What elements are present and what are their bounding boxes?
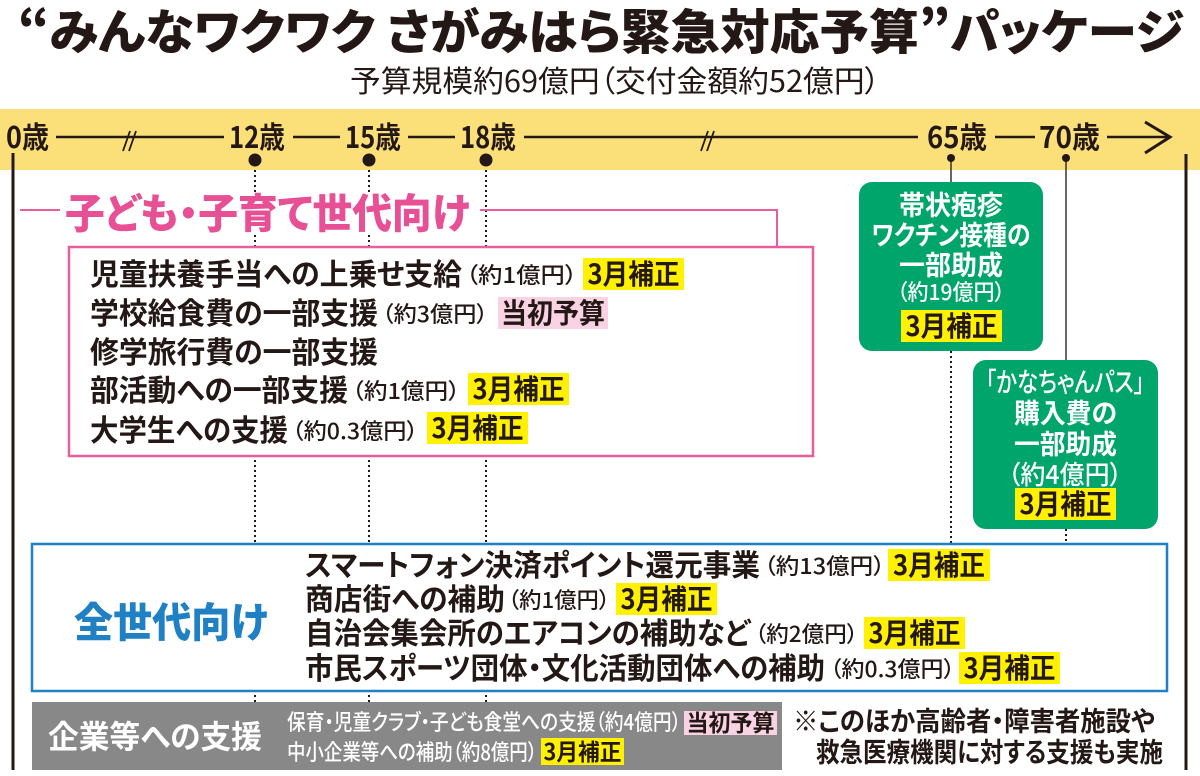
row: 3月補正	[432, 407, 524, 447]
row: （約0.3億円）	[292, 414, 418, 446]
row: 中小企業等への補助（約8億円）	[287, 735, 537, 767]
row: 3月補正	[620, 578, 712, 618]
row: （約2億円）	[755, 617, 858, 649]
row: （約3億円）	[382, 297, 488, 329]
row: スマートフォン決済ポイント還元事業	[305, 541, 760, 585]
age labels: 12歳	[229, 113, 285, 157]
row: 3月補正	[544, 733, 622, 767]
age timeline band	[0, 109, 1200, 170]
age labels	[6, 113, 1100, 157]
age labels: 18歳	[460, 113, 516, 157]
row: （約1億円）	[508, 583, 610, 615]
row: 大学生への支援	[90, 406, 288, 450]
row: 当初予算	[501, 292, 605, 332]
row: 保育・児童クラブ・子ども食堂への支援（約4億円）	[287, 705, 681, 737]
row: 3月補正	[472, 368, 564, 408]
panel: shingles vaccine: ワクチン接種の	[872, 214, 1030, 253]
row: 3月補正	[893, 544, 985, 584]
panel: Kanachan pass: 一部助成	[1014, 423, 1117, 462]
row: 3月補正	[964, 647, 1056, 687]
row: 当初予算	[686, 704, 774, 738]
row: 自治会集会所のエアコンの補助など	[305, 609, 752, 653]
row: （約0.3億円）	[830, 652, 955, 684]
panel: Kanachan pass: （約4億円）	[1008, 455, 1122, 492]
row: 3月補正	[868, 612, 960, 652]
subtitle: 予算規模約69億円（交付金額約52億円）	[350, 57, 880, 101]
age labels: 65歳	[927, 113, 987, 157]
row: 修学旅行費の一部支援	[90, 328, 378, 372]
heading: all generations: 全世代向け	[74, 589, 268, 649]
age labels: 0歳	[6, 113, 49, 157]
axis line with arrow	[56, 122, 1170, 153]
age guide lines and dots	[13, 153, 1186, 770]
panel: shingles vaccine: 一部助成	[899, 244, 1003, 283]
row	[90, 366, 569, 410]
panel: shingles vaccine: 帯状疱疹	[899, 184, 1003, 223]
age labels: 70歳	[1039, 113, 1100, 157]
row	[305, 541, 990, 585]
row: 3月補正	[588, 253, 680, 293]
heading: children: 子ども・子育て世代向け	[65, 180, 470, 240]
row	[90, 250, 684, 294]
panel: shingles vaccine: （約19億円）	[897, 275, 1005, 307]
panel: Kanachan pass: 3月補正	[1020, 483, 1112, 523]
row: 市民スポーツ団体・文化活動団体への補助	[305, 644, 825, 688]
panel: Kanachan pass: 購入費の	[1014, 392, 1117, 431]
row: 商店街への補助	[305, 575, 505, 619]
panel: shingles vaccine: 3月補正	[906, 305, 998, 345]
row	[90, 406, 528, 450]
row: （約1億円）	[466, 258, 577, 290]
row	[90, 289, 608, 333]
row: （約13億円）	[764, 549, 885, 581]
panel: business support	[32, 702, 782, 770]
panel: Kanachan pass	[973, 360, 1158, 529]
row	[305, 575, 717, 619]
age labels: 15歳	[345, 113, 401, 157]
panel: shingles vaccine	[859, 182, 1043, 351]
row: 児童扶養手当への上乗せ支給	[90, 250, 462, 294]
row: 部活動への一部支援	[90, 366, 348, 410]
note	[793, 700, 1163, 770]
panel: Kanachan pass: 「かなちゃんパス」	[986, 361, 1144, 400]
panel: all generations	[32, 541, 1167, 691]
row: （約1億円）	[352, 374, 460, 406]
note: ※このほか高齢者・障害者施設や	[793, 700, 1155, 739]
heading: business support: 企業等への支援	[48, 712, 262, 758]
panel: children and child-rearing	[20, 180, 813, 456]
row: 学校給食費の一部支援	[90, 289, 378, 333]
